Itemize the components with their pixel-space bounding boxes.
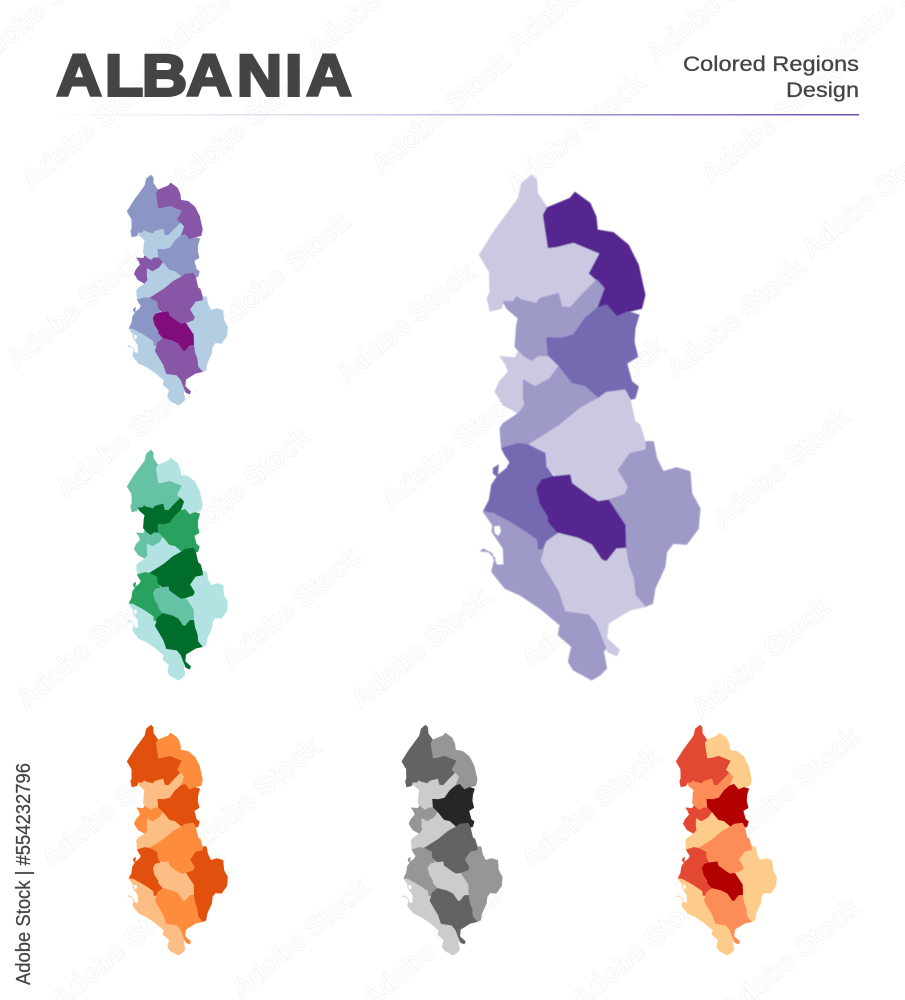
watermark pattern: Adobe Stock	[660, 251, 811, 385]
region: Durres	[495, 352, 558, 413]
watermark pattern: Adobe Stock	[715, 721, 866, 855]
region: Fier	[483, 443, 558, 550]
map: small blue-purple Albania	[127, 175, 228, 405]
watermark pattern: Adobe Stock	[705, 401, 856, 535]
region: Elbasan	[528, 390, 646, 502]
watermark pattern: Adobe Stock	[345, 581, 496, 715]
map: small red Albania	[676, 725, 777, 955]
subtitle: Colored Regions	[683, 53, 859, 76]
watermark pattern: Adobe Stock	[0, 241, 151, 375]
region: north-west	[479, 175, 600, 311]
watermark pattern: Adobe Stock	[520, 331, 671, 465]
title: ALBANIA	[56, 42, 352, 108]
stock credit: Adobe Stock | #554232796	[13, 763, 35, 985]
subtitle: Design	[786, 79, 859, 102]
watermark pattern: Adobe Stock	[165, 421, 316, 555]
watermark pattern: Adobe Stock	[175, 731, 326, 865]
region: Vlore	[481, 512, 607, 680]
region: Lezhe	[503, 280, 604, 362]
watermark pattern: Adobe Stock	[165, 61, 316, 195]
region: north-east	[543, 192, 645, 317]
map: large purple Albania	[479, 175, 700, 680]
region: Gjirokaster	[540, 533, 645, 656]
watermark pattern: Adobe Stock	[15, 61, 166, 195]
map: small orange Albania	[127, 725, 228, 955]
map: small green Albania	[127, 450, 228, 680]
watermark pattern: Adobe Stock	[375, 381, 526, 515]
watermark pattern: Adobe Stock	[515, 741, 666, 875]
watermark pattern: Adobe Stock	[10, 581, 161, 715]
watermark pattern: Adobe Stock	[330, 256, 481, 390]
region: Korce	[608, 442, 700, 607]
watermark pattern: Adobe Stock	[695, 56, 846, 190]
watermark pattern: Adobe Stock	[215, 541, 366, 675]
watermark pattern: Adobe Stock	[365, 46, 516, 180]
watermark pattern: Adobe Stock	[35, 741, 186, 875]
watermark pattern: Adobe Stock	[685, 591, 836, 725]
watermark pattern: Adobe Stock	[205, 206, 356, 340]
region: Tirane	[500, 367, 598, 448]
watermark pattern: Adobe Stock	[50, 371, 201, 505]
subtitle	[683, 53, 859, 102]
region: Berat	[537, 475, 626, 562]
region: Diber	[547, 305, 639, 399]
watermark pattern: Adobe Stock	[500, 66, 651, 200]
map: small grey Albania	[402, 725, 502, 955]
watermark pattern: Adobe Stock	[515, 541, 666, 675]
